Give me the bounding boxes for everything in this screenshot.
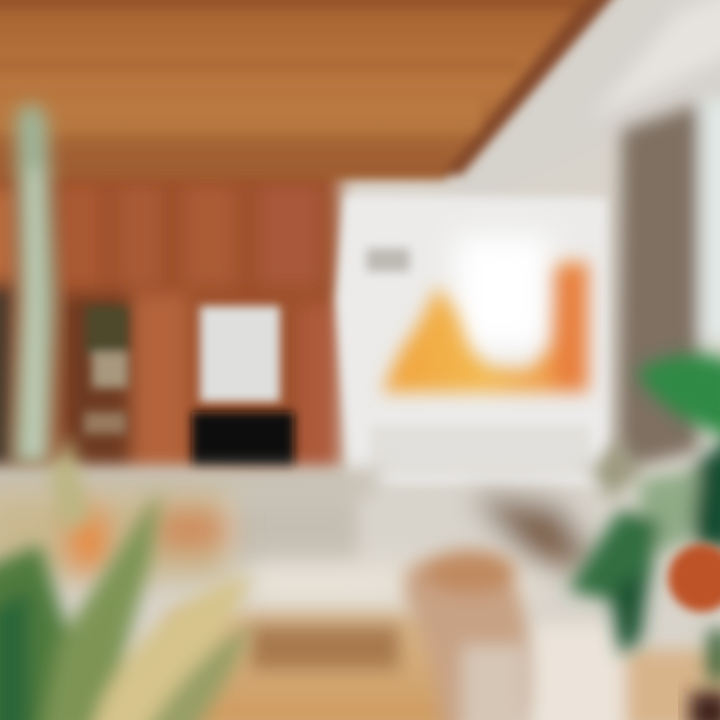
wood wall bbox=[0, 150, 340, 473]
upper right white ceiling bbox=[445, 0, 720, 200]
ledge and low furniture bbox=[0, 468, 380, 565]
chart glow bbox=[455, 235, 550, 350]
left plant stalk bbox=[12, 104, 56, 465]
floor area bbox=[250, 490, 600, 605]
wood floor bbox=[170, 612, 720, 720]
plant backdrop bbox=[0, 490, 232, 580]
bottom left plant bbox=[0, 435, 250, 720]
plant leaves bbox=[0, 435, 250, 720]
shelf niche bbox=[84, 306, 128, 434]
right plant leaves bbox=[568, 355, 720, 655]
animal or chair shape bbox=[405, 550, 530, 720]
wood ceiling bbox=[0, 0, 628, 180]
white chart panel bbox=[336, 195, 610, 488]
right plant bbox=[568, 355, 720, 720]
area chart bbox=[382, 262, 588, 392]
right column bbox=[618, 100, 720, 470]
terracotta pot bbox=[668, 544, 720, 612]
framed picture bbox=[200, 306, 280, 402]
dark screen bbox=[192, 412, 294, 468]
lower right base bbox=[690, 630, 720, 720]
